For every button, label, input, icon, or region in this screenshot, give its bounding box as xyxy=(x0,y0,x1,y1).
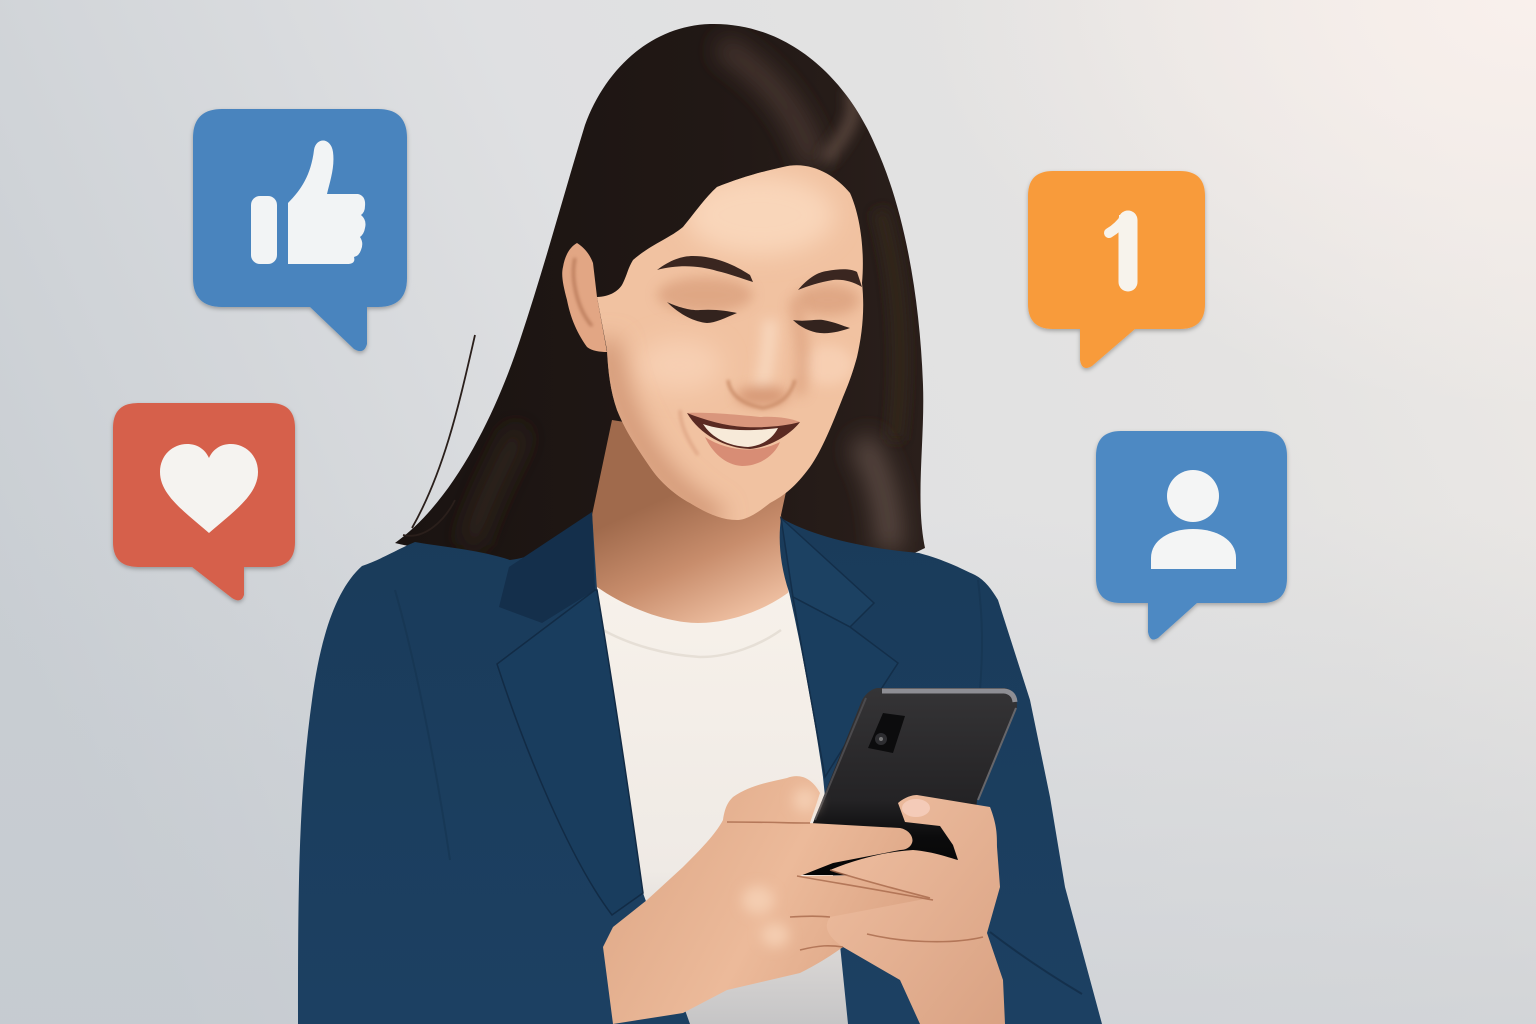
knuckle highlights xyxy=(742,788,817,947)
left eye xyxy=(667,302,737,323)
left eyebrow xyxy=(657,256,753,282)
shirt xyxy=(597,587,848,1024)
upper lip xyxy=(687,413,800,428)
woman xyxy=(298,24,1102,1024)
shirt collar line xyxy=(603,630,781,657)
cuff xyxy=(990,932,1082,994)
neck xyxy=(592,420,795,630)
lapel left xyxy=(497,590,643,915)
teeth xyxy=(703,424,778,447)
nose shadow xyxy=(736,386,788,406)
collar right xyxy=(781,518,874,627)
icon: heart speech bubble xyxy=(113,403,295,600)
finger lines xyxy=(727,822,983,950)
lower lip xyxy=(705,437,780,466)
hair highlights xyxy=(470,45,900,550)
collar left xyxy=(499,512,595,623)
phone camera xyxy=(868,713,905,753)
hair back xyxy=(395,24,925,570)
icon: notification count speech bubble xyxy=(1028,171,1205,368)
icon: person speech bubble xyxy=(1096,431,1287,640)
smile line xyxy=(680,410,698,455)
ear xyxy=(562,243,607,352)
hair strands xyxy=(403,335,475,536)
lapel right xyxy=(793,597,898,777)
right hand xyxy=(827,795,1005,1024)
blazer left xyxy=(298,512,690,1024)
left hand xyxy=(603,776,940,1024)
mouth interior xyxy=(687,413,800,449)
right eye xyxy=(793,320,850,333)
blazer right xyxy=(780,518,1102,1024)
thumb nail xyxy=(902,799,930,817)
sleeve seams xyxy=(395,580,982,860)
ear inner xyxy=(574,258,592,326)
nose xyxy=(728,380,795,408)
right eyebrow xyxy=(798,269,862,290)
phone xyxy=(798,688,1017,875)
notification number: 1 xyxy=(1092,185,1156,315)
face xyxy=(597,165,864,520)
icon: thumbs up speech bubble xyxy=(193,109,407,351)
